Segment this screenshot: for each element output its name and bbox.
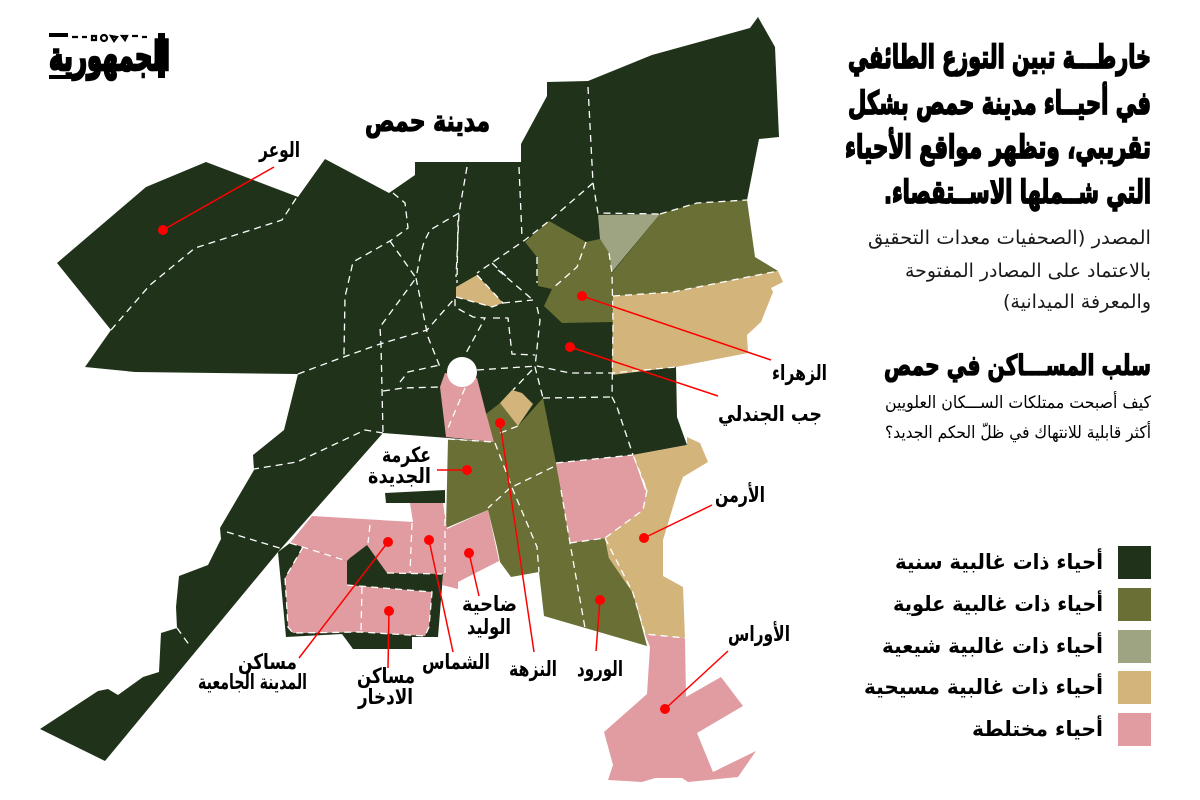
callout: مساكن الادخار: الادخار <box>357 685 413 709</box>
legend item: mixed <box>972 713 1151 746</box>
legend item: Sunni <box>895 546 1151 579</box>
callout: الوعر <box>158 138 300 235</box>
source note <box>868 227 1151 313</box>
white circle <box>447 357 477 387</box>
legend item: Sunni: أحياء ذات غالبية سنية <box>895 547 1103 574</box>
logo: الجمهورية: الجمهورية <box>49 34 170 80</box>
story subtitle: أكثر قابلية للانتهاك في ظلّ الحكم الجديد؟ <box>885 421 1151 443</box>
callout: مساكن المدينة الجامعية: مساكن <box>238 650 297 674</box>
legend item: Christian <box>864 671 1151 704</box>
districts: Sunni-majority base <box>40 17 779 761</box>
callout: ضاحية الوليد: ضاحية <box>462 592 517 616</box>
callout: مساكن الادخار: مساكن <box>357 664 415 688</box>
callout: الشماس: الشماس <box>422 650 490 674</box>
legend item: Shia: أحياء ذات غالبية شيعية <box>882 631 1103 658</box>
callout: مساكن الادخار <box>357 606 415 709</box>
callout: عكرمة الجديدة <box>368 443 472 488</box>
title block <box>845 38 1151 211</box>
callout: ضاحية الوليد <box>462 548 517 639</box>
districts: Alawite-majority <box>446 200 778 646</box>
callout: الأوراس: الأوراس <box>728 620 790 646</box>
source note: والمعرفة الميدانية) <box>1003 291 1151 313</box>
districts: Christian-majority <box>456 271 783 638</box>
callout: الورود: الورود <box>577 657 623 681</box>
callout: مساكن المدينة الجامعية <box>198 537 393 694</box>
callout: الشماس <box>422 535 490 674</box>
callout: الأرمن: الأرمن <box>715 481 765 507</box>
source note: المصدر (الصحفيات معدات التحقيق <box>868 227 1151 249</box>
story subtitle: كيف أصبحت ممتلكات الســـكان العلويين <box>885 391 1152 413</box>
callout: جب الجندلي: جب الجندلي <box>718 402 822 426</box>
districts: mixed <box>285 373 756 782</box>
district: Shia-majority <box>598 214 660 272</box>
callout: النزهة <box>495 418 557 681</box>
legend <box>864 546 1151 746</box>
map of Homs neighbourhoods <box>40 17 783 782</box>
legend item: Shia <box>882 630 1151 663</box>
callout: الأوراس <box>660 620 790 714</box>
callout: ضاحية الوليد: الوليد <box>467 615 511 639</box>
callout: الزهراء: الزهراء <box>772 361 827 385</box>
legend item: Alawite: أحياء ذات غالبية علوية <box>893 589 1103 616</box>
callout: الزهراء <box>577 291 827 385</box>
legend item: Christian: أحياء ذات غالبية مسيحية <box>864 672 1103 699</box>
callout: عكرمة الجديدة: عكرمة <box>382 443 431 467</box>
callout: الأرمن <box>639 481 765 543</box>
callout: عكرمة الجديدة: الجديدة <box>368 464 431 488</box>
callout: الورود <box>577 595 623 681</box>
callout: الوعر: الوعر <box>258 138 300 162</box>
callout: مساكن المدينة الجامعية: المدينة الجامعية <box>198 670 307 694</box>
callout: جب الجندلي <box>565 342 822 426</box>
story subtitle <box>885 391 1152 443</box>
district boundaries <box>111 87 778 646</box>
callout: النزهة: النزهة <box>509 657 557 681</box>
legend item: Alawite <box>893 588 1151 621</box>
heading: مدينة حمص: مدينة حمص <box>365 104 490 138</box>
source note: بالاعتماد على المصادر المفتوحة <box>905 260 1151 282</box>
logo: الجمهورية <box>49 33 170 80</box>
legend item: mixed: أحياء مختلطة <box>972 714 1103 741</box>
